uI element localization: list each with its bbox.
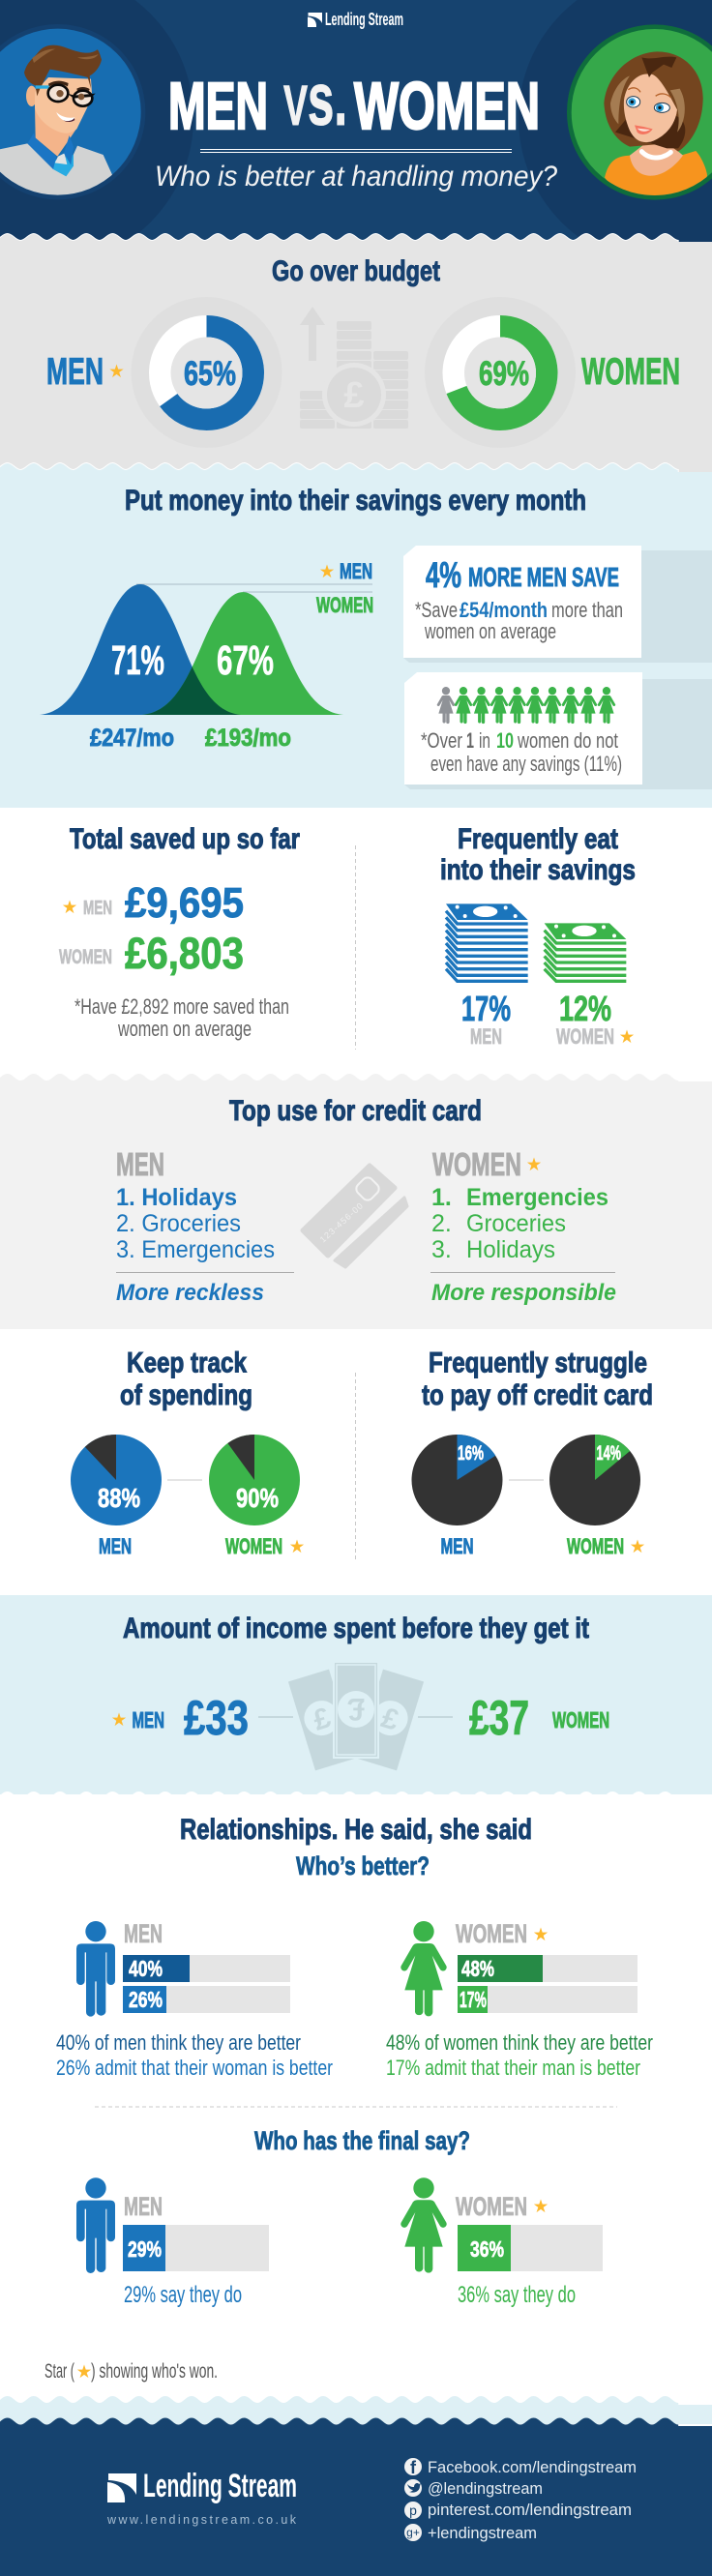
list: women: 2.: [431, 1210, 452, 1237]
bar: women 36%: WOMEN: [456, 2192, 527, 2221]
icon: woman portrait: [567, 24, 712, 200]
heading: Top use for credit card: [229, 1095, 482, 1127]
pie: women 14%: [549, 1435, 640, 1525]
logo: Lending Stream: [143, 2468, 297, 2504]
chart: bell curves: £193/mo: [205, 725, 291, 752]
stat: men 17%: MEN: [470, 1024, 502, 1049]
social links: [428, 2458, 637, 2542]
subheading: final say: Who has the final say?: [254, 2126, 470, 2155]
icon: pinterest: p: [409, 2502, 417, 2518]
bars: men: [123, 1919, 290, 2013]
bars: men: MEN: [124, 1919, 163, 1948]
icon: arrow and coin stacks: £: [343, 375, 365, 416]
chart: bell curves: MEN: [340, 559, 372, 583]
bar: men 29%: [123, 2192, 269, 2308]
callout: 4% more men save: MORE MEN SAVE: [468, 562, 619, 592]
icon: man: [76, 2177, 115, 2273]
stat: men total: [63, 879, 244, 927]
stat: men £33: £33: [184, 1691, 249, 1745]
text: women better: 48% of women think they are better: [386, 2030, 653, 2055]
stat: men £33: [112, 1691, 249, 1745]
bars: men: 40%: [129, 1956, 163, 1981]
pie: women 14%: 14%: [596, 1442, 621, 1465]
icon: facebook: [404, 2458, 422, 2477]
icon: man: [76, 1921, 115, 2017]
chart: bell curves: 71%: [111, 637, 164, 684]
callout: 4% more men save: [403, 546, 712, 663]
list: men: 2. Groceries: [116, 1210, 241, 1237]
pie: men 88%: 88%: [98, 1483, 140, 1513]
list: men: 3. Emergencies: [116, 1236, 275, 1263]
heading: keep track of spending: of spending: [120, 1379, 252, 1411]
heading: total saved: Total saved up so far: [70, 823, 300, 855]
donut: men 65%: [132, 297, 282, 448]
list: women: 1.: [431, 1184, 452, 1211]
chart: bell curves: WOMEN: [316, 593, 373, 617]
heading: frequently struggle: [422, 1347, 653, 1411]
panel: top use for credit card: [0, 1074, 712, 1329]
icon: arrow and coin stacks: [300, 307, 408, 429]
callout: 4% more men save: *Save: [415, 598, 458, 622]
panel: savings every month: [0, 462, 712, 808]
panel: income spent before they get it: [0, 1595, 712, 1794]
chart: bell curves: [40, 559, 373, 752]
chart: bell curves: 67%: [217, 637, 274, 684]
text: women better: 17% admit that their man is better: [386, 2056, 640, 2080]
heading: frequently eat into savings: Frequently eat: [458, 823, 618, 855]
pie labels: [99, 1534, 644, 1558]
list: men: MEN: [116, 1146, 164, 1182]
callout: 1 in 10 women no savings: in: [479, 728, 490, 753]
pie labels: MEN: [441, 1534, 474, 1558]
pie labels: MEN: [99, 1534, 132, 1558]
list: women: WOMEN: [432, 1146, 521, 1182]
icon: facebook: f: [410, 2458, 417, 2477]
icon: twitter: [404, 2479, 422, 2497]
text: women better: [386, 2030, 653, 2080]
legend: star meaning: [44, 2360, 218, 2383]
bar: men 29%: 29% say they do: [124, 2282, 242, 2308]
icon: banknotes: [288, 1662, 424, 1770]
list: women: Emergencies: [466, 1184, 608, 1211]
icon: banknotes: £: [377, 1702, 402, 1737]
label: men: MEN: [46, 351, 104, 393]
subheading: who's better: Who’s better?: [296, 1851, 430, 1880]
bar: men 29%: MEN: [124, 2192, 163, 2221]
callout: 1 in 10 women no savings: 1: [466, 728, 474, 753]
icon: banknotes: £: [347, 1692, 365, 1727]
list: men: [116, 1146, 294, 1306]
heading: frequently eat into savings: into their savings: [440, 854, 636, 886]
stat: men total: MEN: [83, 898, 112, 919]
list: women: [430, 1146, 616, 1306]
bars: women: WOMEN: [456, 1919, 527, 1948]
heading: frequently struggle: to pay off credit card: [422, 1379, 653, 1411]
bar: men 29%: 29%: [128, 2236, 162, 2262]
icon: banknotes: £: [310, 1702, 335, 1737]
stat: women total: [59, 929, 244, 978]
icon: man portrait: [0, 24, 145, 200]
pie labels: WOMEN: [225, 1534, 282, 1558]
stat: men total: £9,695: [125, 879, 244, 927]
social links: +lendingstream: [428, 2524, 537, 2542]
stat: women 12%: [556, 989, 634, 1049]
icon: google plus: [404, 2524, 422, 2541]
panel: go over budget: [0, 234, 712, 472]
social links: pinterest.com/lendingstream: [428, 2501, 632, 2519]
bars: women: 48%: [461, 1956, 494, 1981]
stat: women total: WOMEN: [59, 946, 112, 968]
icon: google plus: g+: [406, 2526, 420, 2539]
chart: bell curves: £247/mo: [90, 725, 174, 752]
callout: 1 in 10 women no savings: *Over: [421, 728, 462, 753]
panel: relationships: [0, 1791, 678, 2383]
legend: star meaning: Star (: [44, 2360, 74, 2383]
callout: 4% more men save: 4%: [426, 555, 461, 595]
bar: women 36%: 36% say they do: [458, 2282, 576, 2308]
stat: men 17%: 17%: [461, 989, 511, 1028]
heading: Put money into their savings every month: [125, 485, 586, 517]
callout: 4% more men save: £54/month: [460, 598, 548, 622]
list: men: More reckless: [116, 1280, 264, 1306]
stat: men £33: MEN: [132, 1707, 164, 1732]
callout: 1 in 10 women no savings: [404, 672, 712, 789]
heading: frequently eat into savings: [440, 823, 636, 886]
logo: Lending Stream: [308, 10, 403, 29]
callout: 4% more men save: more than: [551, 598, 623, 622]
note: [74, 994, 289, 1041]
list: women: 3.: [431, 1236, 452, 1263]
title: [168, 59, 540, 143]
header panel: [0, 0, 712, 266]
panel: keep track and struggle: [71, 1347, 653, 1562]
pie: women 90%: [209, 1435, 300, 1525]
pie: men 16%: [412, 1435, 503, 1525]
subtitle: Who is better at handling money?: [155, 161, 557, 192]
title: MEN: [168, 69, 268, 143]
callout: 4% more men save: women on average: [424, 619, 556, 643]
stat: women 12%: 12%: [559, 989, 611, 1028]
bars: men: 26%: [129, 1987, 163, 2012]
heading: keep track of spending: Keep track: [127, 1347, 247, 1379]
bar: women 36%: [456, 2192, 603, 2308]
stat: women 12%: WOMEN: [556, 1024, 614, 1049]
stat: women £37: [469, 1691, 609, 1745]
icon: pinterest: [404, 2502, 422, 2519]
note: *Have £2,892 more saved than: [74, 994, 289, 1019]
list: men: 1. Holidays: [116, 1184, 237, 1211]
bar: women 36%: 36%: [470, 2236, 504, 2262]
logo: [107, 2468, 297, 2504]
pie: men 16%: 16%: [458, 1442, 484, 1465]
text: men better: 26% admit that their woman is better: [56, 2056, 333, 2080]
panel: total saved and eat into savings: [0, 808, 712, 1079]
heading: keep track of spending: [120, 1347, 252, 1411]
heading: frequently struggle: Frequently struggle: [429, 1347, 647, 1379]
title: WOMEN: [354, 69, 540, 143]
icon: green money stack: [545, 923, 626, 981]
bars: women: [456, 1919, 638, 2013]
icon: woman: [400, 1921, 447, 2016]
stat: women total: £6,803: [125, 929, 244, 978]
text: men better: [56, 2030, 333, 2080]
heading: Relationships. He said, she said: [180, 1814, 532, 1846]
callout: 1 in 10 women no savings: even have any savings (11%): [430, 752, 622, 776]
stat: women £37: WOMEN: [552, 1707, 609, 1732]
text: men better: 40% of men think they are better: [56, 2030, 301, 2055]
header backdrop circles: [0, 0, 712, 266]
donut: women 69%: [425, 297, 576, 448]
callout: 1 in 10 women no savings: women do not: [517, 728, 618, 753]
pie: men 88%: [71, 1435, 162, 1525]
bars: women: 17%: [460, 1987, 487, 2012]
icon: blue money stack: [446, 903, 528, 981]
note: women on average: [117, 1017, 252, 1041]
icon: woman: [400, 2177, 447, 2273]
list: women: More responsible: [431, 1280, 616, 1306]
list: women: Groceries: [466, 1210, 566, 1237]
social links: Facebook.com/lendingstream: [428, 2458, 637, 2476]
icon: credit card: [303, 1166, 407, 1267]
heading: Amount of income spent before they get it: [123, 1613, 589, 1644]
logo: Lending Stream: Lending Stream: [325, 10, 403, 29]
legend: star meaning: ) showing who's won.: [91, 2360, 218, 2383]
heading: Go over budget: [272, 255, 440, 287]
stat: women £37: £37: [469, 1691, 529, 1745]
list: women: Holidays: [466, 1236, 555, 1263]
footer: [0, 2396, 712, 2576]
stat: men 17%: [461, 989, 511, 1049]
social links: @lendingstream: [428, 2479, 543, 2498]
donut: men 65%: 65%: [184, 355, 236, 393]
icon: row of ten women: [437, 687, 615, 724]
title: Vs.: [283, 59, 347, 141]
callout: 1 in 10 women no savings: 10: [496, 728, 514, 753]
pie: women 90%: 90%: [236, 1483, 279, 1513]
donut: women 69%: 69%: [479, 355, 529, 393]
pie labels: WOMEN: [567, 1534, 624, 1558]
website: www.lendingstream.co.uk: [106, 2513, 297, 2527]
icon: credit card: 123-456-00: [318, 1201, 365, 1244]
